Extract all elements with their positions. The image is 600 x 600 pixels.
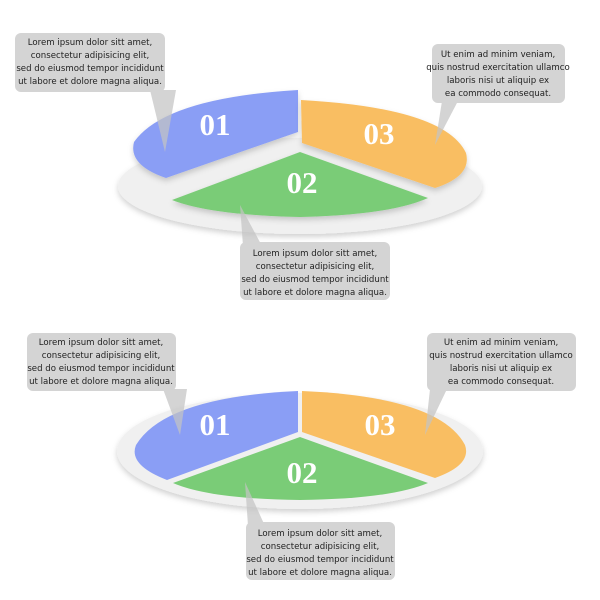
callout: bottom middle: Lorem ipsum dolor sitt amet,	[258, 529, 382, 539]
segment 02 top: 02	[286, 165, 318, 200]
callout: top right: Ut enim ad minim veniam,	[441, 50, 555, 60]
callout: top right: ea commodo consequat.	[445, 89, 551, 99]
callout: bottom left: Lorem ipsum dolor sitt amet,	[39, 338, 163, 348]
callout: top left: Lorem ipsum dolor sitt amet,	[28, 38, 152, 48]
segment 03 top: 03	[364, 116, 394, 151]
callout: bottom right: ea commodo consequat.	[448, 377, 554, 387]
segment 02 bottom	[173, 437, 428, 500]
callout: bottom middle	[245, 482, 395, 580]
base disk top	[118, 138, 482, 234]
callout: top right: laboris nisi ut aliquip ex	[447, 76, 549, 86]
callout: top right: quis nostrud exercitation ullamco	[426, 63, 570, 73]
segment 03 bottom	[302, 391, 466, 478]
callout: top left: ut labore et dolore magna aliqua.	[18, 77, 162, 87]
callout: top middle	[240, 205, 390, 300]
callout: bottom right: quis nostrud exercitation ullamco	[429, 351, 573, 361]
callout: bottom middle: sed do eiusmod tempor incididunt	[246, 555, 394, 565]
segment 01 bottom: 01	[200, 407, 230, 442]
segment 01 top	[133, 90, 298, 178]
callout: top right	[426, 44, 570, 145]
segment 02 top	[172, 152, 428, 217]
callout: bottom left: ut labore et dolore magna aliqua.	[29, 377, 173, 387]
segment 01 bottom	[135, 391, 298, 480]
callout: bottom left	[27, 333, 187, 435]
base disk bottom	[117, 393, 483, 509]
chart: bottom pie	[117, 391, 483, 509]
callout: top left: sed do eiusmod tempor incididunt	[16, 64, 164, 74]
callout: top middle: consectetur adipisicing elit,	[256, 262, 374, 272]
segment 02 bottom: 02	[286, 455, 318, 490]
callout: bottom middle: consectetur adipisicing elit,	[261, 542, 379, 552]
callout: top middle: Lorem ipsum dolor sitt amet,	[253, 249, 377, 259]
segment 03 top	[301, 100, 467, 188]
callout: bottom middle: ut labore et dolore magna aliqua.	[248, 568, 392, 578]
callout: top middle: sed do eiusmod tempor incididunt	[241, 275, 389, 285]
callout: top left	[15, 33, 176, 152]
callout: bottom left: sed do eiusmod tempor incididunt	[27, 364, 175, 374]
callout: bottom right: Ut enim ad minim veniam,	[444, 338, 558, 348]
callout: bottom right: laboris nisi ut aliquip ex	[450, 364, 552, 374]
segment 03 bottom: 03	[364, 407, 396, 442]
callout: bottom left: consectetur adipisicing elit,	[42, 351, 160, 361]
chart: top pie	[118, 90, 482, 234]
segment 01 top: 01	[200, 107, 230, 142]
callout: top middle: ut labore et dolore magna aliqua.	[243, 288, 387, 298]
callout: top left: consectetur adipisicing elit,	[31, 51, 149, 61]
callout: bottom right	[425, 333, 576, 435]
